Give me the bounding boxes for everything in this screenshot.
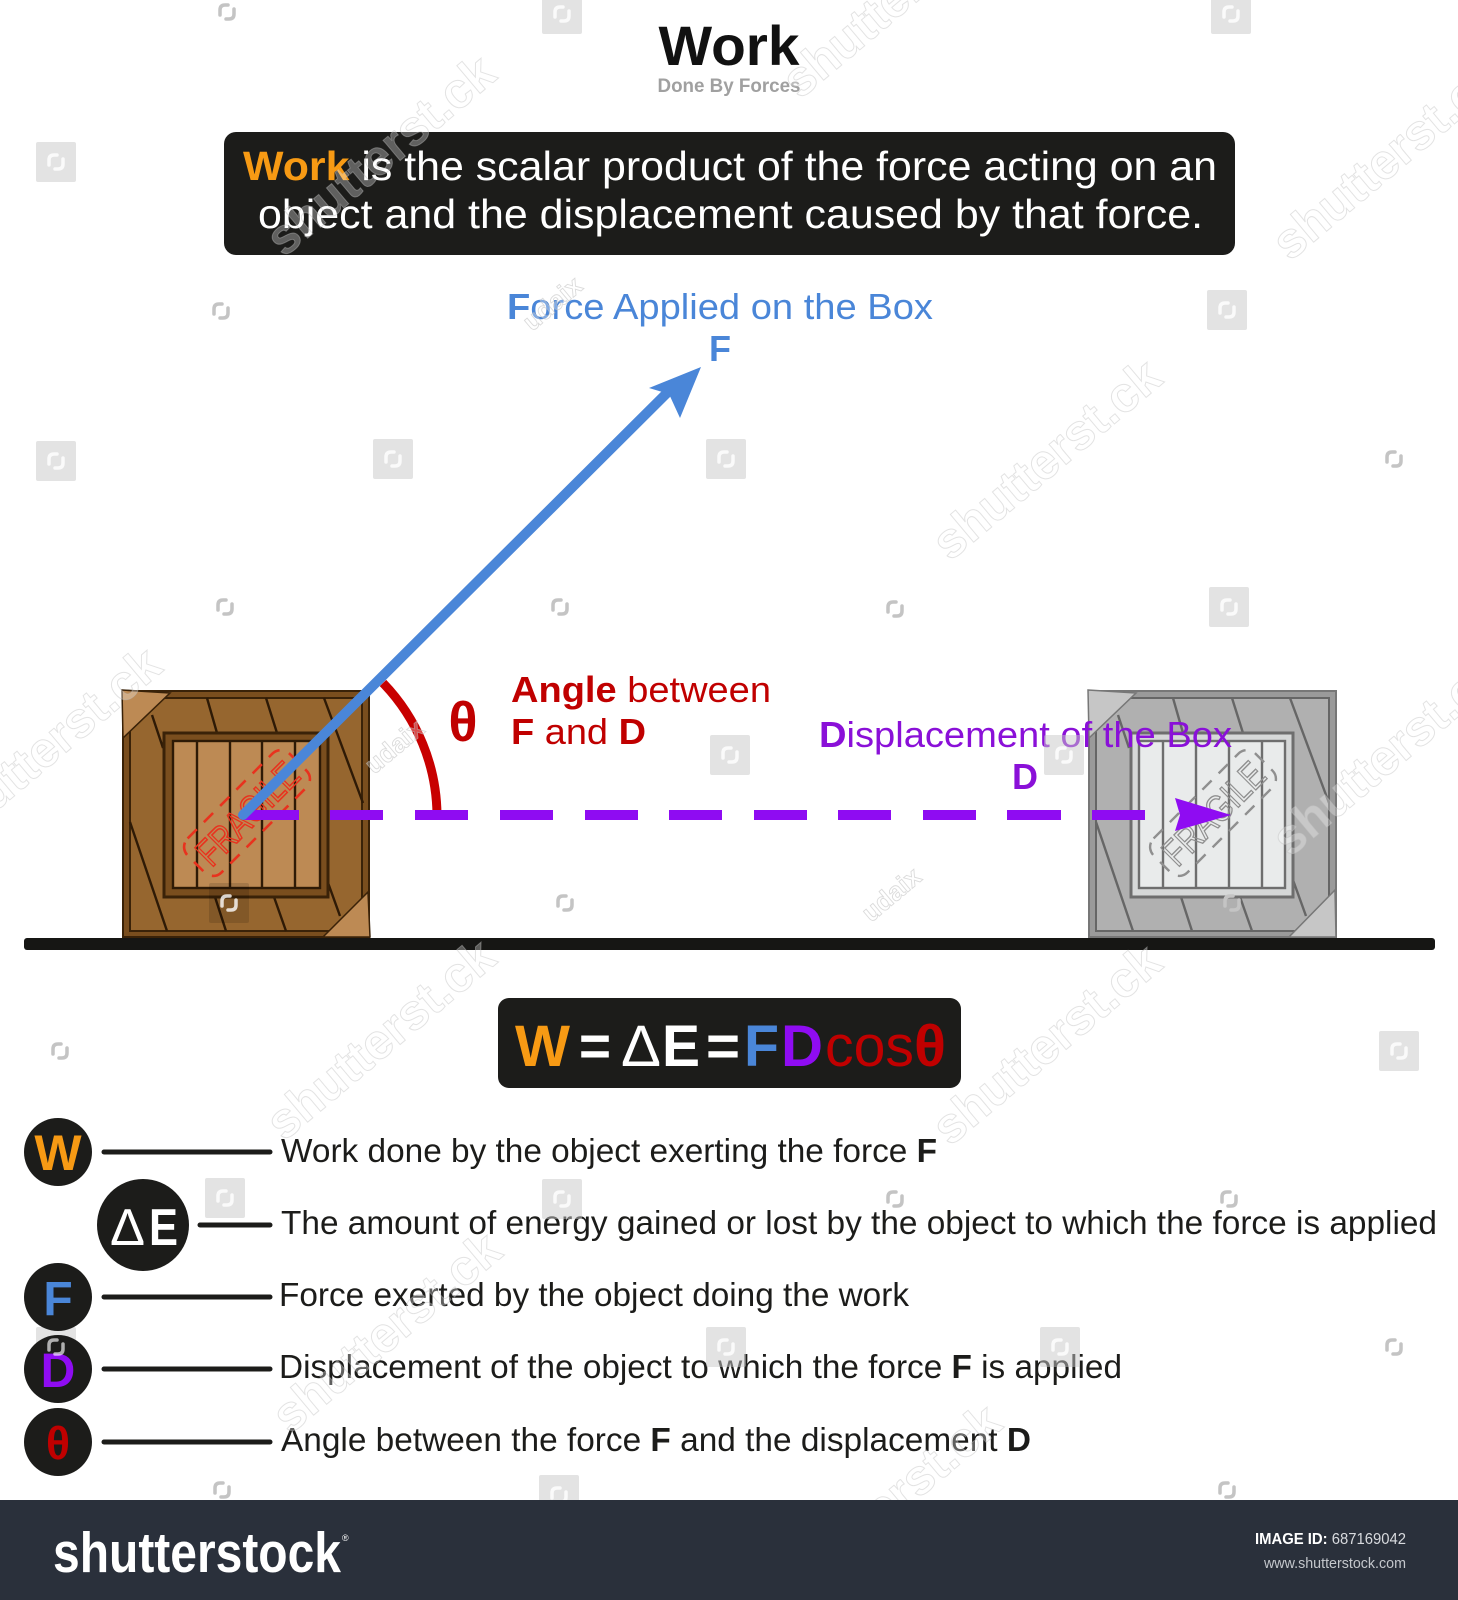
legend row: delta E xyxy=(97,1179,1437,1271)
legend row: delta E: Δ xyxy=(110,1199,145,1257)
grey ghost crate xyxy=(1088,690,1336,937)
formula panel: θ xyxy=(914,1014,946,1079)
legend row: F: F xyxy=(43,1273,73,1326)
legend row: W: W xyxy=(34,1125,82,1181)
angle arc xyxy=(383,683,437,815)
angle label xyxy=(511,669,771,752)
definition panel: object and the displacement caused by that force. xyxy=(258,191,1203,237)
text: shutterst.ck xyxy=(921,347,1172,570)
title: Work xyxy=(658,14,800,77)
legend row: D: D xyxy=(41,1345,75,1398)
text: udaix xyxy=(856,861,927,928)
formula panel: = xyxy=(706,1014,740,1079)
theta symbol: θ xyxy=(448,690,478,753)
text: shutterst.ck xyxy=(261,1220,512,1443)
legend row: theta: θ xyxy=(46,1417,70,1469)
formula panel: cos xyxy=(825,1014,914,1079)
force label xyxy=(507,286,933,369)
footer bar xyxy=(0,1500,1458,1600)
footer registered mark: ® xyxy=(342,1533,349,1543)
subtitle: Done By Forces xyxy=(658,76,800,97)
text: shutterst.ck xyxy=(255,43,506,266)
footer url: www.shutterstock.com xyxy=(1263,1555,1406,1572)
displacement dashed arrow xyxy=(243,798,1231,831)
text: udaix xyxy=(517,270,588,337)
formula panel xyxy=(498,998,961,1088)
text: shutterst.ck xyxy=(921,932,1172,1155)
formula panel: = xyxy=(579,1014,611,1079)
text: udaix xyxy=(359,713,430,780)
legend row: delta E: The amount of energy gained or lost by the object to which the force is applied xyxy=(281,1204,1437,1241)
footer image id: IMAGE ID: 687169042 xyxy=(1255,1531,1406,1548)
wooden crate: FRAGILE xyxy=(188,754,309,875)
formula panel: Δ xyxy=(621,1014,661,1079)
text: shutterst.ck xyxy=(255,927,506,1150)
legend row: W: Work done by the object exerting the force F xyxy=(281,1132,937,1169)
definition panel: Work is the scalar product of the force acting on an xyxy=(243,143,1217,189)
ground line xyxy=(24,938,1435,950)
displacement label: D xyxy=(1012,756,1038,797)
legend row: D xyxy=(24,1335,1122,1403)
angle label: Angle between xyxy=(511,669,771,710)
displacement label: Displacement of the Box xyxy=(819,714,1232,755)
displacement label xyxy=(819,714,1232,797)
legend row: theta xyxy=(24,1408,1031,1476)
legend row: W xyxy=(24,1118,937,1186)
force label: Force Applied on the Box xyxy=(507,286,933,327)
angle label: F and D xyxy=(511,711,646,752)
legend row: theta: Angle between the force F and the displacement D xyxy=(281,1421,1031,1458)
legend row: D: Displacement of the object to which the force F is applied xyxy=(279,1348,1122,1385)
legend row: F: Force exerted by the object doing the work xyxy=(279,1276,909,1313)
formula panel: E xyxy=(662,1014,700,1079)
formula panel: F xyxy=(744,1014,779,1079)
formula panel: W xyxy=(515,1014,570,1079)
legend row: F xyxy=(24,1263,909,1331)
formula panel: D xyxy=(781,1014,823,1079)
definition panel xyxy=(224,132,1235,255)
wooden crate xyxy=(122,690,370,937)
grey ghost crate: FRAGILE xyxy=(1154,754,1275,875)
force label: F xyxy=(709,328,731,369)
force arrow xyxy=(243,367,701,815)
legend row: delta E: E xyxy=(149,1199,178,1257)
footer logo: shutterstock xyxy=(53,1521,341,1585)
